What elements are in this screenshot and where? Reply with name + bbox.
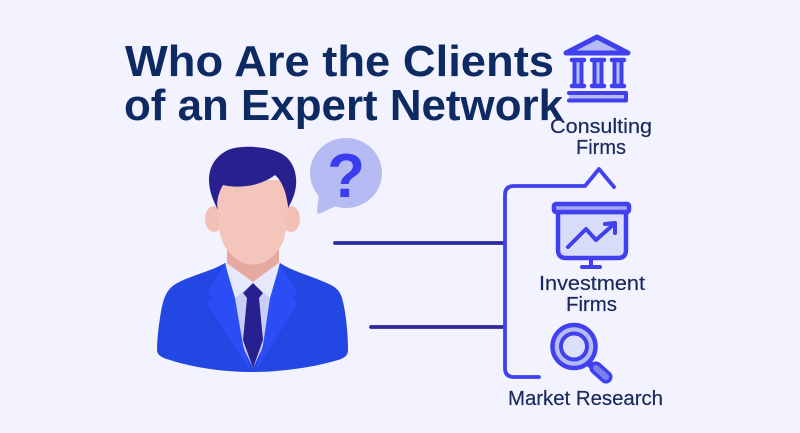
icon: presentation board xyxy=(554,204,629,267)
hair xyxy=(209,147,296,210)
icon: question speech bubble xyxy=(310,138,382,214)
label: investment firms: Firms xyxy=(566,294,617,316)
title xyxy=(124,37,564,130)
title: of an Expert Network xyxy=(124,81,564,130)
label: market research: Market Research xyxy=(508,388,663,410)
label: consulting firms: Firms xyxy=(576,137,626,159)
icon: question speech bubble: ? xyxy=(327,142,365,211)
ears xyxy=(205,206,223,232)
tie xyxy=(243,283,263,368)
icon: businessman xyxy=(157,147,348,372)
connector lines xyxy=(335,243,503,327)
right lapel xyxy=(255,264,298,372)
icon: bank building xyxy=(566,37,628,100)
title: Who Are the Clients xyxy=(125,37,554,86)
shirt xyxy=(225,262,280,368)
label: consulting firms: Consulting xyxy=(550,116,652,138)
neck xyxy=(227,240,279,284)
label: consulting firms xyxy=(550,116,652,159)
collar xyxy=(225,262,280,298)
label: investment firms: Investment xyxy=(539,273,645,295)
label: investment firms xyxy=(539,273,645,316)
left lapel xyxy=(207,264,251,372)
bracket with arrow xyxy=(505,169,614,377)
icon: magnifying glass xyxy=(552,325,606,377)
suit jacket xyxy=(157,263,348,372)
face xyxy=(218,180,287,264)
